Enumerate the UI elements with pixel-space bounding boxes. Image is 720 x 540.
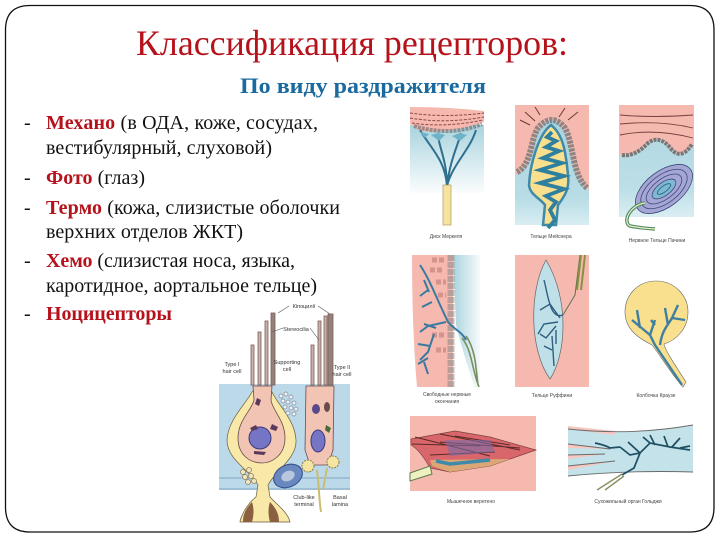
list item: photo: - — [24, 167, 31, 189]
caption: Тельце Мейснера — [530, 233, 572, 240]
labels: terminal — [294, 502, 314, 508]
list item: mechano — [24, 112, 318, 159]
list item: mechano: - — [24, 112, 31, 134]
illustration: Golgi tendon organ — [568, 425, 693, 505]
caption: окончания — [435, 399, 459, 405]
illustration: Meissner corpuscle — [515, 105, 589, 240]
list item: nociceptors: - — [24, 303, 31, 325]
illustration: Krause end bulb — [625, 281, 688, 399]
labels: Stereocilia — [283, 327, 310, 333]
labels: Supporting — [274, 360, 300, 366]
labels — [223, 304, 351, 508]
labels: lamina — [332, 502, 349, 508]
subtitle: По виду раздражителя — [240, 73, 486, 98]
list item: mechano: вестибулярный, слуховой) — [46, 137, 272, 159]
caption: Колбочка Краузе — [636, 393, 676, 399]
list item: chemo — [24, 250, 317, 297]
tissue background — [219, 384, 350, 490]
labels: Club-like — [293, 495, 315, 501]
caption: Тельце Руффини — [532, 393, 572, 399]
type I hair cell — [227, 388, 296, 522]
labels: hair cell — [333, 372, 351, 378]
caption: Диск Меркеля — [430, 234, 463, 240]
supporting cell granules — [279, 392, 298, 416]
list item: chemo: каротидное, аортальное тельце) — [46, 275, 317, 297]
receptor list — [24, 112, 340, 325]
title: Классификация рецепторов: — [136, 23, 568, 63]
list item: thermo — [24, 197, 340, 243]
labels: Basal — [333, 495, 347, 501]
list item: nociceptors: Ноцицепторы — [46, 303, 172, 325]
stereocilia — [251, 313, 333, 385]
supporting cell nucleus — [270, 460, 306, 492]
caption: Нервное Тельце Пачини — [629, 238, 686, 244]
labels: Type I — [225, 362, 240, 368]
list item: thermo: - — [24, 197, 31, 219]
caption — [423, 392, 471, 405]
list item: chemo: Хемо (слизистая носа, языка, — [46, 250, 295, 272]
list item: thermo: Термо (кожа, слизистые оболочки — [46, 197, 340, 219]
illustration: free nerve endings — [412, 255, 480, 405]
labels: hair cell — [223, 369, 241, 375]
list item: thermo: верхних отделов ЖКТ) — [46, 221, 243, 243]
illustration: Merkel disc — [410, 107, 484, 240]
labels: cell — [283, 367, 291, 373]
list item: photo: Фото (глаз) — [46, 167, 145, 189]
caption: Свободные нервные — [423, 392, 471, 398]
illustration: Ruffini corpuscle — [515, 255, 589, 399]
caption: Мышечное веретено — [447, 499, 495, 505]
labels: Type II — [334, 365, 351, 371]
type II hair cell — [305, 386, 334, 465]
illustration: Pacinian corpuscle — [619, 105, 701, 244]
list item: chemo: - — [24, 250, 31, 272]
labels: Кіпоцилії — [293, 304, 316, 310]
terminal granules — [240, 468, 256, 484]
illustration: muscle spindle — [410, 416, 536, 505]
caption: Сухожильный орган Гольджи — [594, 498, 662, 505]
illustration: vestibular hair cells — [219, 304, 351, 522]
list item: mechano: Механо (в ОДА, коже, сосудах, — [46, 112, 318, 134]
